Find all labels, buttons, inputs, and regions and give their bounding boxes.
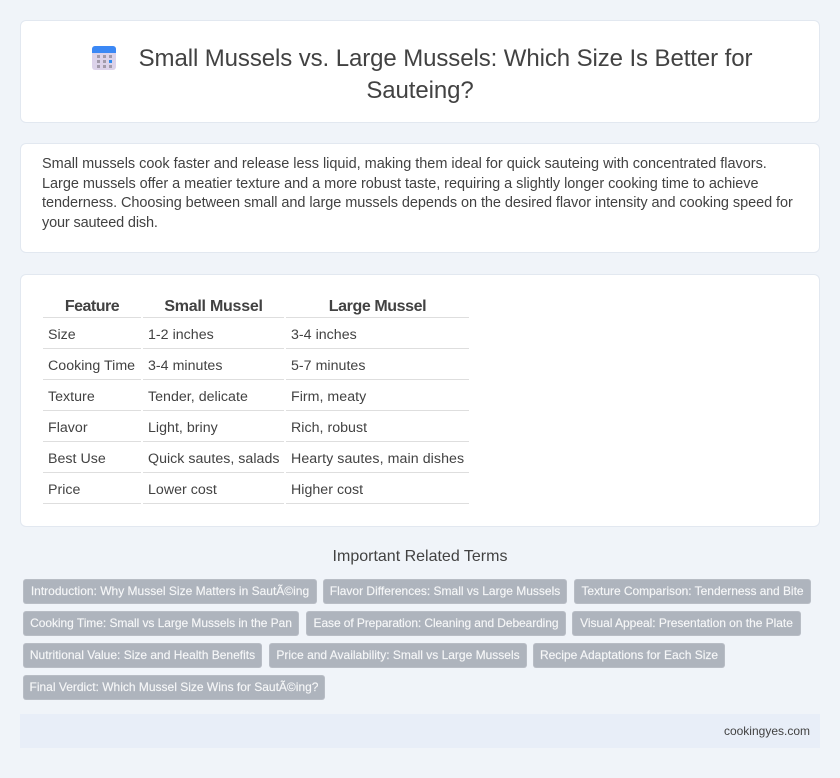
table: mussel comparison: 1-2 inches bbox=[148, 327, 214, 343]
table: mussel comparison: Light, briny bbox=[148, 420, 218, 436]
text block: summary bbox=[42, 156, 793, 231]
table: mussel comparison: Firm, meaty bbox=[291, 389, 366, 405]
table: mussel comparison: Rich, robust bbox=[291, 420, 367, 436]
table: mussel comparison bbox=[43, 298, 469, 504]
table: mussel comparison: Flavor bbox=[48, 420, 88, 436]
table: mussel comparison: Cooking Time bbox=[48, 358, 135, 374]
panel: related term tags: Ease of Preparation: Cleaning and Debearding bbox=[314, 616, 558, 630]
table: mussel comparison: Price bbox=[48, 482, 80, 498]
panel: summary paragraph bbox=[20, 143, 820, 253]
table: mussel comparison: Best Use bbox=[48, 451, 106, 467]
panel: related term tags: Visual Appeal: Presentation on the Plate bbox=[580, 616, 793, 630]
table: mussel comparison: 3-4 minutes bbox=[148, 358, 222, 374]
table: mussel comparison: Quick sautes, salads bbox=[148, 451, 280, 467]
panel: related term tags: Final Verdict: Which Mussel Size Wins for SautÃ©ing? bbox=[30, 680, 318, 694]
title bbox=[139, 45, 752, 104]
panel: related term tags: Flavor Differences: Small vs Large Mussels bbox=[330, 584, 560, 598]
panel: title header bbox=[20, 20, 820, 123]
table: mussel comparison: Higher cost bbox=[291, 482, 363, 498]
text block: summary: tenderness. Choosing between small and large mussels depends on the desired flavor intensity and cooking speed for bbox=[42, 195, 793, 211]
panel: related term tags: Price and Availability: Small vs Large Mussels bbox=[276, 648, 520, 662]
footer bbox=[20, 714, 820, 748]
panel: related term tags: Nutritional Value: Size and Health Benefits bbox=[30, 648, 255, 662]
panel: related term tags: Cooking Time: Small vs Large Mussels in the Pan bbox=[30, 616, 292, 630]
panel: related term tags bbox=[23, 579, 811, 700]
text block: site credit: cookingyes.com bbox=[724, 724, 810, 738]
table: mussel comparison: Lower cost bbox=[148, 482, 217, 498]
panel: related term tags: Recipe Adaptations for Each Size bbox=[540, 648, 718, 662]
table: mussel comparison: Feature bbox=[65, 298, 119, 315]
text block: summary: Large mussels offer a meatier texture and a more robust taste, requiring a slightly longer cooking time to achieve bbox=[42, 176, 759, 192]
panel: related term tags: Introduction: Why Mussel Size Matters in SautÃ©ing bbox=[31, 584, 309, 598]
table: mussel comparison: Large Mussel bbox=[329, 298, 426, 315]
title: Sauteing? bbox=[366, 77, 474, 104]
panel: comparison table bbox=[20, 274, 820, 527]
title: Small Mussels vs. Large Mussels: Which Size Is Better for bbox=[139, 45, 752, 72]
table: mussel comparison: 3-4 inches bbox=[291, 327, 357, 343]
icon: calendar bbox=[92, 46, 116, 70]
table: mussel comparison: Texture bbox=[48, 389, 95, 405]
table: mussel comparison: Small Mussel bbox=[164, 298, 263, 315]
text block: summary: Small mussels cook faster and release less liquid, making them ideal for quick sauteing with concentrated flavors. bbox=[42, 156, 767, 172]
text block: summary: your sauteed dish. bbox=[42, 215, 158, 231]
table: mussel comparison: 5-7 minutes bbox=[291, 358, 365, 374]
table: mussel comparison: Size bbox=[48, 327, 76, 343]
table: mussel comparison: Tender, delicate bbox=[148, 389, 248, 405]
panel: related term tags: Texture Comparison: Tenderness and Bite bbox=[581, 584, 804, 598]
heading: related terms: Important Related Terms bbox=[333, 548, 507, 565]
table: mussel comparison: Hearty sautes, main dishes bbox=[291, 451, 464, 467]
